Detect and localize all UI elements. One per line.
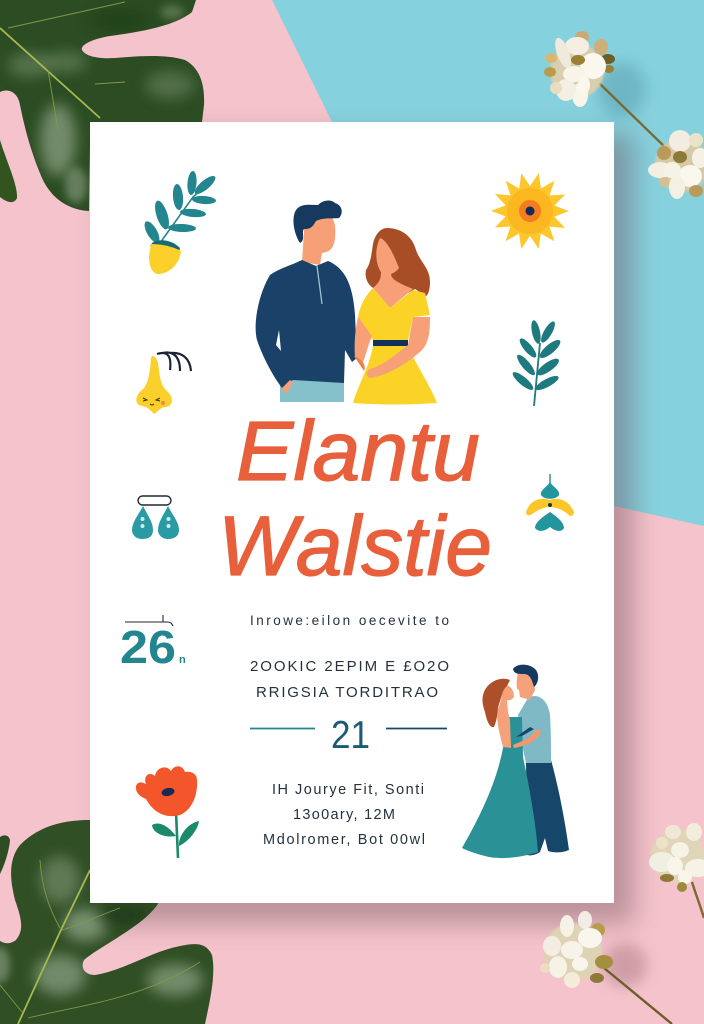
details line two: 13o0ary, 12M <box>293 807 395 823</box>
leaf: top left <box>0 0 204 211</box>
flower cluster: right edge top <box>648 130 704 199</box>
man head and neck <box>517 672 535 700</box>
leaf: small lobe top left <box>0 140 17 202</box>
icon: red flower <box>136 766 199 858</box>
flower sprig: bottom <box>540 911 672 1024</box>
icon: yellow creature with comb <box>136 353 191 414</box>
woman skin <box>497 685 514 748</box>
leaf: bottom left <box>0 820 213 1024</box>
invitation line: Inrowe:eilon oecevite to <box>250 613 449 628</box>
icon: bee ornament <box>526 474 574 531</box>
details line three: Mdolromer, Bot 00wl <box>263 832 425 848</box>
joined hands <box>354 356 365 371</box>
man hair <box>513 665 538 687</box>
man shirt <box>518 696 551 763</box>
man trousers <box>526 760 569 855</box>
details line one: IH Jourye Fit, Sonti <box>272 782 424 798</box>
icon: teal earrings <box>132 496 179 539</box>
man sweater <box>256 260 357 388</box>
date badge: 26: 26 <box>120 621 176 673</box>
woman hair <box>482 679 510 727</box>
names line one: 2OOKIC 2EPIM E £O2O <box>250 658 449 675</box>
title: Elantu: Elantu <box>236 404 480 498</box>
icon: potted branch <box>142 171 218 252</box>
woman dress <box>353 288 437 404</box>
background: blue paper <box>272 0 704 526</box>
man hand <box>282 380 293 393</box>
woman hair <box>366 228 430 296</box>
names line two: RRIGSIA TORDITRAO <box>256 684 438 701</box>
man trousers <box>280 380 344 402</box>
date badge: 26: n <box>179 654 186 666</box>
divider with date 21: 21 <box>331 714 370 757</box>
date badge: 26 <box>120 615 186 673</box>
icon: teal fern <box>510 319 563 406</box>
woman arms <box>355 317 430 378</box>
woman face and neck <box>373 238 413 308</box>
flower sprig: top right <box>544 31 668 150</box>
embracing arm <box>513 730 541 748</box>
woman dress <box>462 717 538 858</box>
illustration: embracing couple <box>462 665 569 858</box>
icon: sun <box>484 164 576 258</box>
man collar zip <box>317 266 322 304</box>
icon: yellow pot <box>149 244 181 274</box>
arm gap <box>276 330 281 351</box>
card shadow <box>104 134 634 924</box>
woman belt <box>373 340 408 346</box>
man neck and face <box>302 215 335 265</box>
flower cluster: right edge bottom <box>649 823 704 918</box>
card <box>90 122 614 903</box>
man hair <box>293 201 342 243</box>
title: Walstie: Walstie <box>218 499 492 593</box>
illustration: standing couple <box>256 201 437 404</box>
leaf: small lobe bottom left <box>0 835 10 874</box>
